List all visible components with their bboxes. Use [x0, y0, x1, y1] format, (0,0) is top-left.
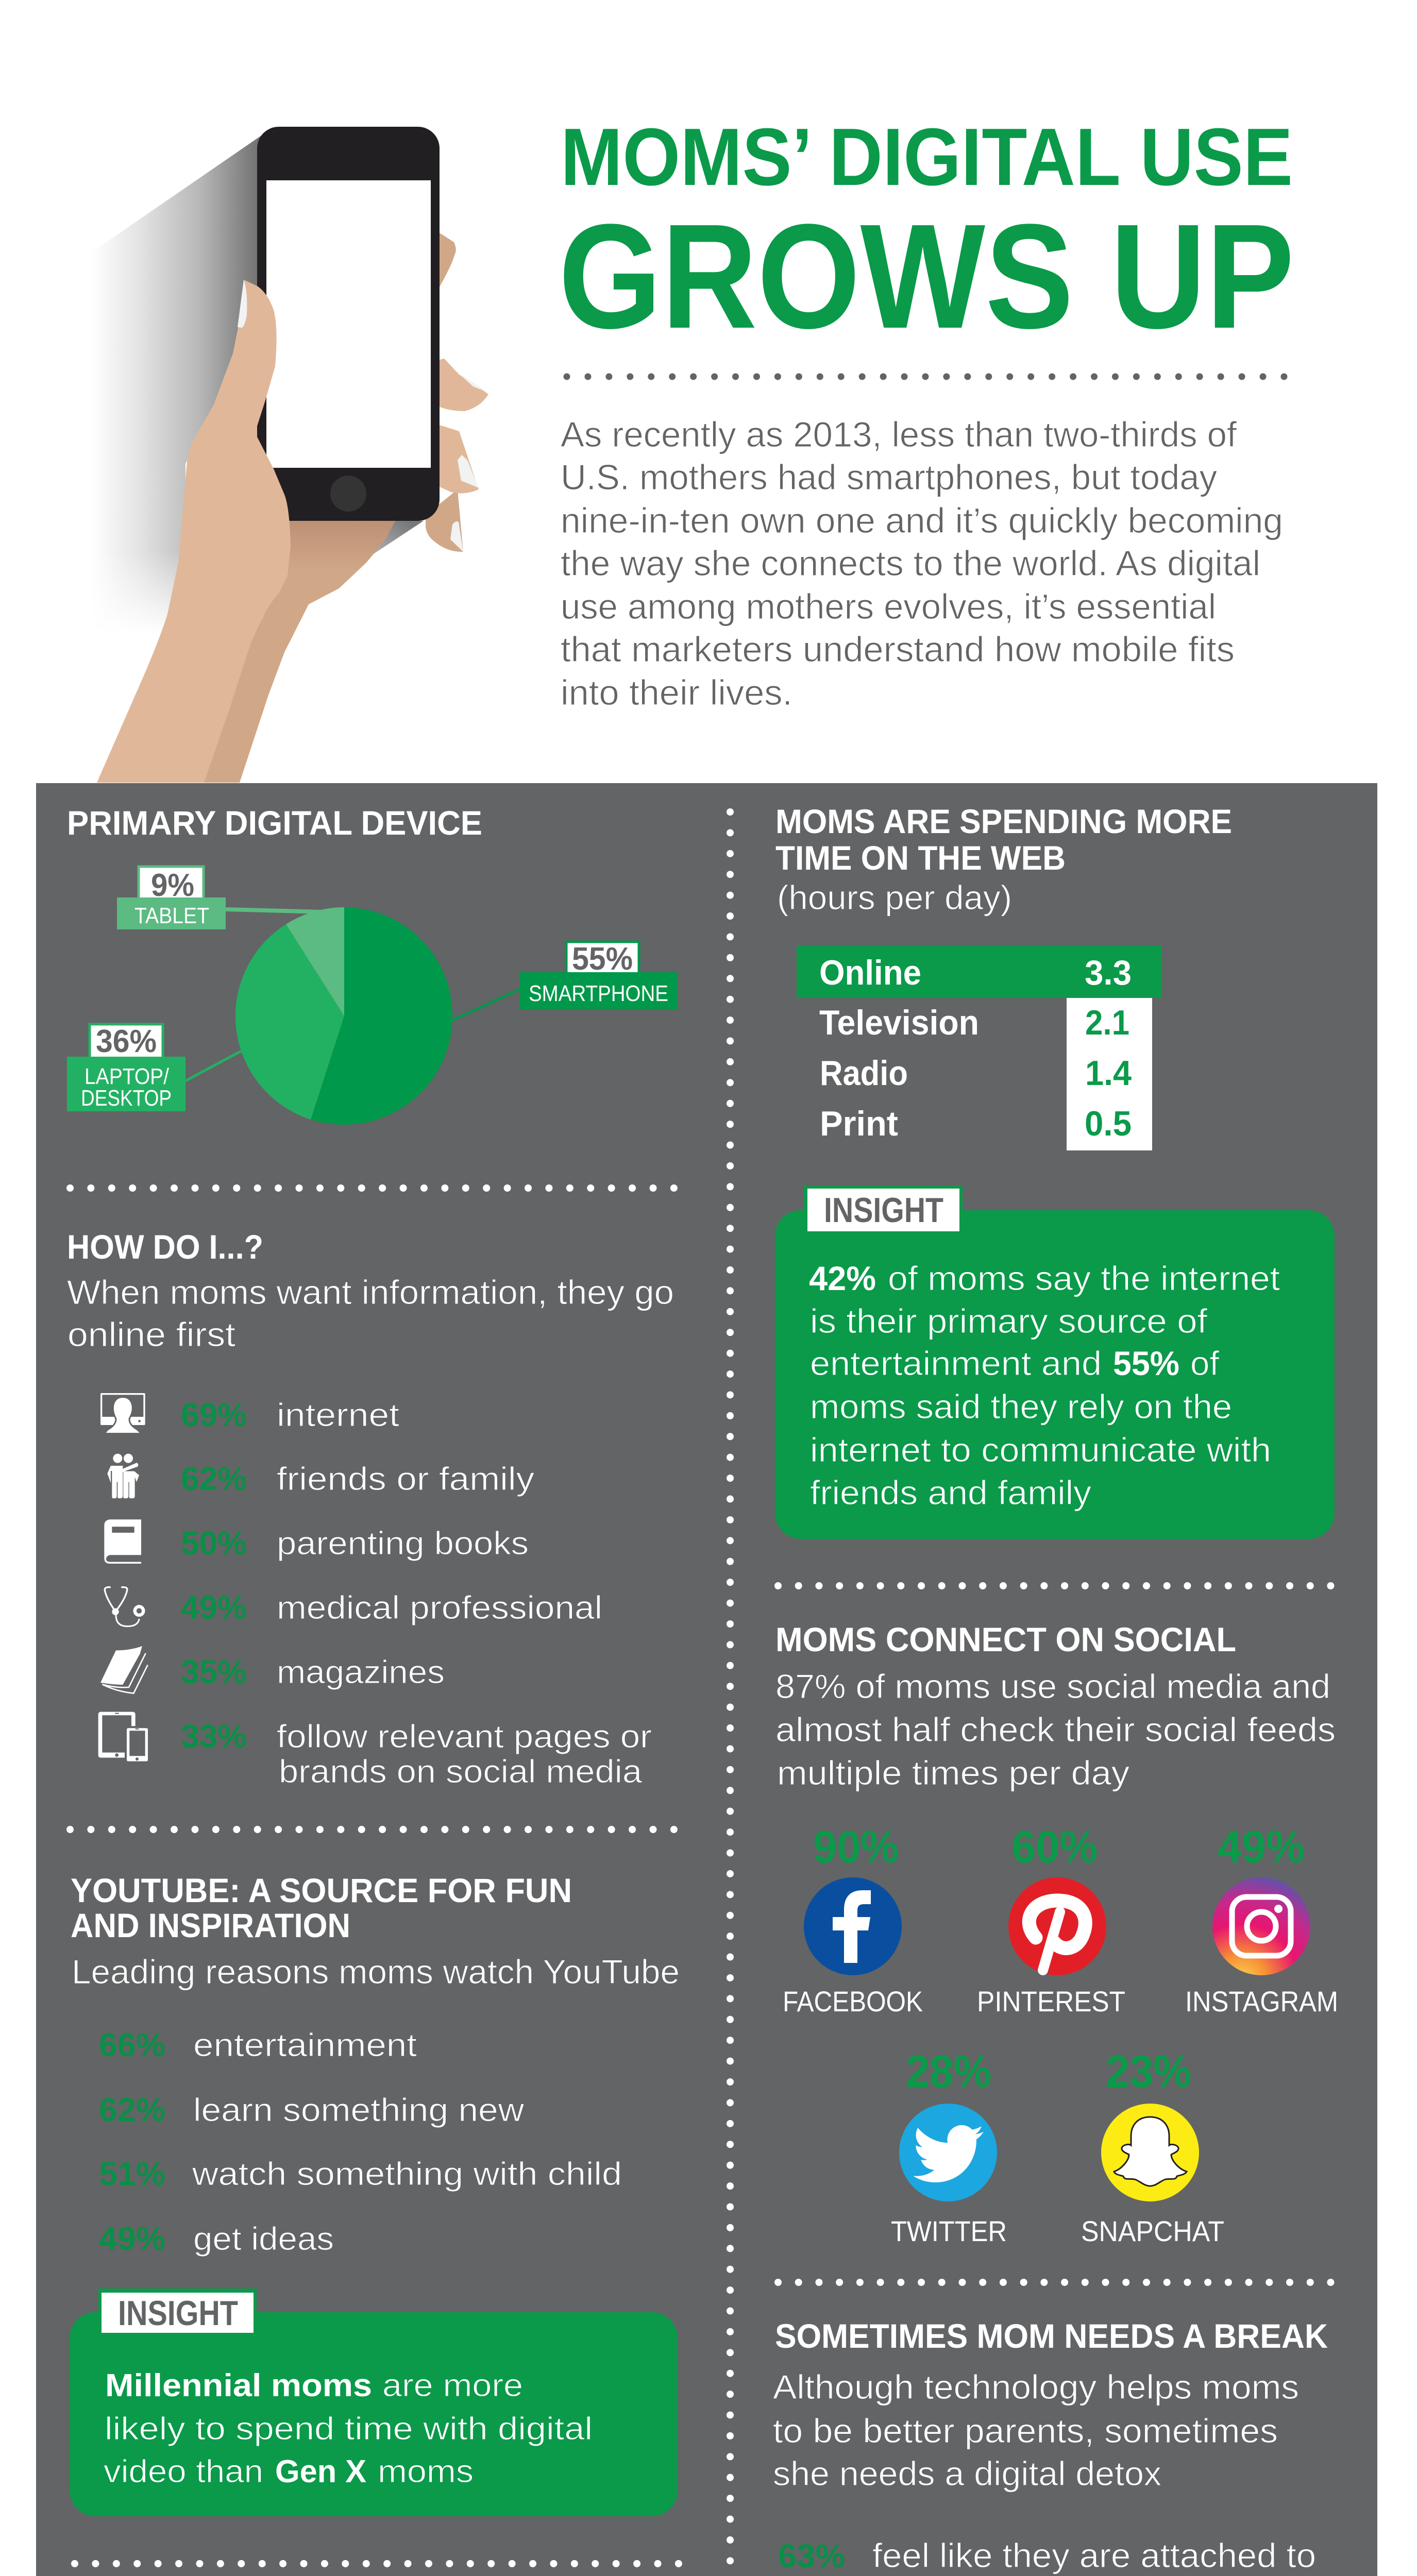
icon: person at monitor: [100, 1393, 145, 1434]
panel: youtube: [70, 1871, 680, 2516]
description: multiple times per day: [777, 1754, 1129, 1792]
pie label: smartphone: [520, 941, 678, 1010]
intro text: nine-in-ten own one and it’s quickly becoming: [561, 501, 1283, 540]
pie label: laptop/desktop: LAPTOP/: [85, 1064, 170, 1089]
illustration: hand holding phone: [91, 127, 488, 783]
list: information sources: 35%: [181, 1653, 247, 1690]
table: hours per day: 3.3: [1085, 953, 1132, 992]
intro text: that marketers understand how mobile fits: [561, 630, 1235, 669]
stat: facebook: 90%: [813, 1821, 899, 1872]
pie label: laptop/desktop: DESKTOP: [81, 1086, 172, 1111]
insight box: is their primary source of: [810, 1302, 1208, 1340]
description: almost half check their social feeds: [775, 1710, 1336, 1749]
stat: snapchat: SNAPCHAT: [1081, 2215, 1224, 2247]
list: information sources: parenting books: [277, 1526, 529, 1562]
heading: PRIMARY DIGITAL DEVICE: [67, 804, 482, 842]
panel: sometimes mom needs a break: [773, 2317, 1328, 2576]
table: hours per day: [797, 945, 1161, 1150]
table: hours per day: 0.5: [1085, 1104, 1132, 1143]
intro text: use among mothers evolves, it’s essential: [561, 587, 1216, 626]
list: detox stats: feel like they are attached to: [872, 2536, 1316, 2574]
insight box: of: [1190, 1344, 1220, 1382]
list: reasons: get ideas: [193, 2221, 334, 2257]
stat: instagram: [1185, 1821, 1338, 2018]
stat: twitter: TWITTER: [891, 2215, 1007, 2247]
stat: pinterest: [977, 1821, 1125, 2018]
insight box: moms said they rely on the: [810, 1387, 1232, 1426]
list: information sources: brands on social media: [279, 1754, 643, 1790]
insight box: [775, 1186, 1335, 1539]
stat: instagram: 49%: [1218, 1821, 1305, 1872]
pie label: laptop/desktop: 36%: [96, 1024, 157, 1059]
heading: MOMS CONNECT ON SOCIAL: [775, 1620, 1236, 1658]
pie label: laptop/desktop: [67, 1024, 185, 1111]
intro text: [561, 415, 1283, 713]
list: information sources: magazines: [277, 1654, 445, 1690]
insight box: 42%: [809, 1259, 876, 1297]
heading: TIME ON THE WEB: [775, 839, 1066, 877]
heading: YOUTUBE: A SOURCE FOR FUN: [71, 1871, 572, 1909]
description: Although technology helps moms: [773, 2368, 1299, 2406]
stat: pinterest: PINTEREST: [977, 1985, 1125, 2018]
heading: [775, 802, 1232, 877]
list: reasons: 51%: [99, 2155, 165, 2192]
stat: facebook: [783, 1821, 923, 2018]
insight box: Gen X: [275, 2454, 366, 2489]
list: information sources: 69%: [181, 1396, 247, 1433]
insight box: INSIGHT: [118, 2294, 238, 2333]
list: information sources: friends or family: [277, 1461, 535, 1497]
icon: friends: [107, 1454, 139, 1498]
description: online first: [68, 1315, 235, 1353]
table: hours per day: Print: [820, 1104, 898, 1143]
pie label: tablet: [117, 867, 226, 929]
panel: how do I: [67, 1228, 674, 1790]
description: When moms want information, they go: [67, 1273, 674, 1311]
panel: primary digital device: [67, 804, 678, 1125]
heading: MOMS ARE SPENDING MORE: [775, 802, 1232, 840]
list: reasons: 66%: [99, 2026, 165, 2063]
description: [775, 1667, 1336, 1792]
subtitle: (hours per day): [777, 878, 1012, 917]
list: information sources: medical professional: [277, 1590, 602, 1626]
stat: snapchat: [1081, 2046, 1224, 2247]
insight box: [70, 2289, 678, 2516]
insight box: likely to spend time with digital: [105, 2411, 593, 2447]
pie label: smartphone: 55%: [572, 941, 633, 977]
icon: magazines: [100, 1646, 148, 1693]
stat: instagram: INSTAGRAM: [1185, 1985, 1338, 2018]
list: information sources: follow relevant pages or: [277, 1719, 652, 1755]
insight box: are more: [382, 2368, 523, 2403]
icon: stethoscope: [105, 1587, 143, 1626]
list: reasons: watch something with child: [192, 2156, 622, 2192]
list: information sources: 50%: [181, 1524, 247, 1562]
description: Leading reasons moms watch YouTube: [72, 1953, 680, 1991]
list: information sources: 33%: [181, 1718, 247, 1755]
insight box: Millennial moms: [105, 2368, 372, 2403]
stat: pinterest: 60%: [1012, 1821, 1098, 1872]
list: information sources: 62%: [181, 1460, 247, 1497]
table: hours per day: 2.1: [1085, 1003, 1129, 1042]
description: [773, 2368, 1299, 2493]
panel: time on the web: [775, 802, 1335, 1539]
stat: facebook: FACEBOOK: [783, 1985, 923, 2018]
table: hours per day: Television: [819, 1003, 979, 1042]
title: MOMS’ DIGITAL USE: [561, 112, 1293, 202]
intro text: U.S. mothers had smartphones, but today: [561, 457, 1217, 497]
stat: twitter: 28%: [906, 2046, 991, 2097]
description: [67, 1273, 674, 1353]
insight box: 55%: [1113, 1344, 1179, 1382]
insight box: of moms say the internet: [888, 1259, 1280, 1297]
stat: snapchat: 23%: [1106, 2046, 1191, 2097]
heading: [71, 1871, 572, 1944]
description: she needs a digital detox: [773, 2454, 1161, 2493]
icon: tablet and phone: [98, 1712, 149, 1762]
panel: moms connect on social: [775, 1620, 1338, 2247]
pie label: tablet: 9%: [151, 868, 194, 903]
heading: HOW DO I...?: [67, 1228, 263, 1266]
icon: book: [104, 1519, 141, 1564]
intro text: into their lives.: [561, 673, 792, 713]
insight box: moms: [378, 2454, 474, 2489]
list: reasons: 49%: [99, 2220, 165, 2257]
title: GROWS UP: [559, 193, 1294, 360]
list: reasons: entertainment: [193, 2027, 417, 2063]
insight box: INSIGHT: [824, 1191, 943, 1230]
list: information sources: internet: [277, 1397, 400, 1433]
panel: main gray background: [36, 783, 1377, 2576]
pie label: tablet: TABLET: [134, 903, 209, 928]
list: reasons: 62%: [99, 2091, 165, 2128]
list: reasons: learn something new: [193, 2092, 525, 2128]
insight box: friends and family: [810, 1473, 1091, 1512]
description: to be better parents, sometimes: [773, 2412, 1278, 2450]
list: reasons: [99, 2026, 622, 2257]
intro text: the way she connects to the world. As digital: [561, 544, 1260, 583]
title: [559, 112, 1294, 360]
insight box: internet to communicate with: [810, 1431, 1271, 1469]
table: hours per day: Radio: [820, 1054, 908, 1093]
list: information sources: 49%: [181, 1589, 247, 1626]
stat: twitter: [891, 2046, 1007, 2247]
pie chart: [185, 907, 520, 1125]
table: hours per day: Online: [819, 953, 921, 992]
intro text: As recently as 2013, less than two-thirds of: [561, 415, 1237, 454]
table: hours per day: 1.4: [1085, 1054, 1132, 1093]
heading: AND INSPIRATION: [71, 1906, 350, 1944]
insight box: entertainment and: [810, 1344, 1102, 1382]
heading: SOMETIMES MOM NEEDS A BREAK: [775, 2317, 1328, 2355]
description: 87% of moms use social media and: [775, 1667, 1330, 1705]
insight box: video than: [104, 2454, 263, 2489]
list: detox stats: 63%: [778, 2537, 845, 2574]
pie label: smartphone: SMARTPHONE: [529, 981, 668, 1006]
list: information sources: [181, 1396, 652, 1790]
